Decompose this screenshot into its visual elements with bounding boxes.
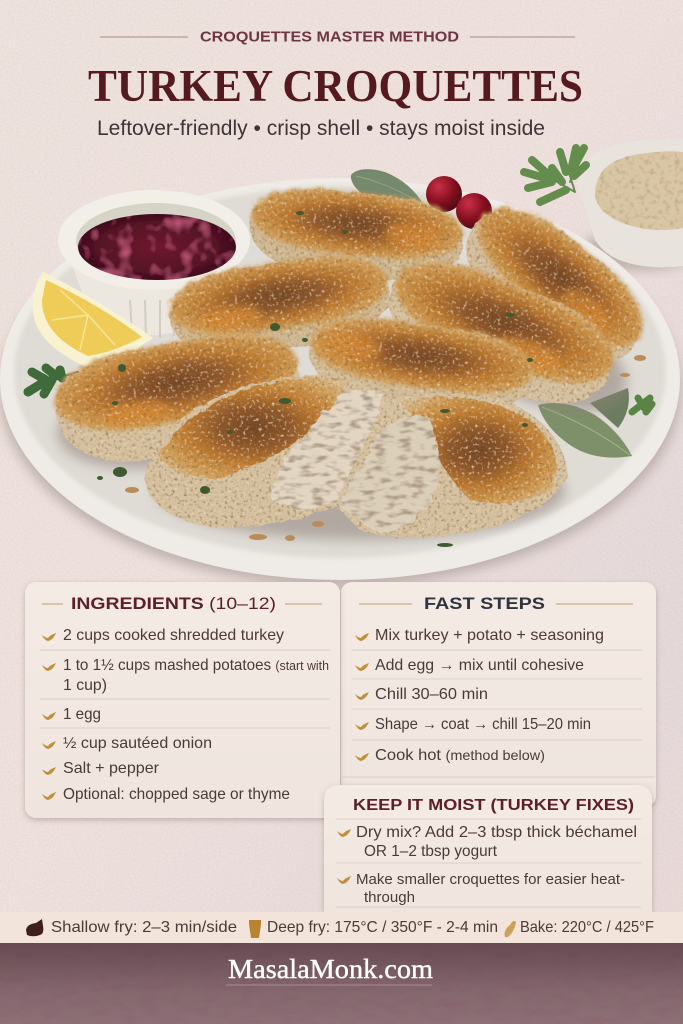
croquette middle right (373, 243, 627, 423)
lemon wedge (33, 272, 153, 366)
broken croquette right (335, 393, 568, 538)
ingredient texts: ½ cup sautéed onion (63, 735, 212, 752)
title: TURKEY CROQUETTES (88, 61, 583, 111)
croquette center (304, 310, 538, 420)
moist texts: Make smaller croquettes for easier heat- (356, 871, 625, 888)
dip ramekin (58, 190, 250, 338)
ingredient texts (63, 627, 329, 803)
ingredient texts: Salt + pepper (63, 760, 160, 777)
step checks (355, 633, 369, 761)
step texts: Shape → coat → chill 15–20 min (375, 716, 591, 733)
header (88, 28, 583, 140)
panel: ingredients (25, 582, 340, 818)
eyebrow: croquettes master method: CROQUETTES MASTER METHOD (200, 28, 459, 46)
icon: oven mitt (505, 921, 516, 937)
parsley left (28, 368, 78, 394)
parsley sprig top right (524, 148, 586, 202)
moist texts (356, 824, 637, 906)
ingredient texts: Optional: chopped sage or thyme (63, 786, 290, 803)
parsley right (632, 398, 652, 412)
croquette top center (245, 182, 467, 288)
croquette middle left (164, 248, 396, 364)
shallow fry text: Shallow fry: 2–3 min/side (51, 919, 237, 936)
herb flecks (97, 211, 533, 547)
subtitle: Leftover-friendly • crisp shell • stays moist inside (97, 117, 545, 140)
moist checks (337, 829, 351, 884)
heading: keep it moist: KEEP IT MOIST (TURKEY FIXES) (353, 797, 634, 814)
step texts: Add egg → mix until cohesive (375, 657, 584, 674)
cherries (426, 176, 492, 229)
step texts: Mix turkey + potato + seasoning (375, 627, 604, 644)
ingredient texts: 2 cups cooked shredded turkey (63, 627, 284, 644)
croquette left (47, 322, 311, 474)
ingredient texts: 1 cup) (63, 677, 107, 694)
step texts: Cook hot (method below) (375, 747, 545, 764)
croquette top right (444, 187, 662, 387)
heading: ingredients: INGREDIENTS (10–12) (71, 594, 276, 613)
bake text: Bake: 220°C / 425°F (520, 919, 654, 936)
moist texts: through (364, 889, 415, 906)
icon: fryer (249, 920, 261, 938)
broken croquette left (145, 376, 385, 527)
moist texts: OR 1–2 tbsp yogurt (364, 843, 498, 860)
website: MasalaMonk.com (228, 954, 433, 984)
cooking methods strip (0, 912, 683, 943)
panel: keep it moist (324, 785, 652, 912)
step texts (375, 627, 604, 764)
plate shadow under croquettes (49, 251, 645, 540)
footer band (0, 943, 683, 1024)
deep fry text: Deep fry: 175°C / 350°F - 2-4 min (267, 919, 498, 936)
ingredient texts: 1 egg (63, 706, 101, 723)
icon: pan (26, 919, 43, 936)
moist texts: Dry mix? Add 2–3 tbsp thick béchamel (356, 824, 637, 841)
sage leaf top (351, 169, 424, 205)
ingredient checks (42, 633, 56, 800)
food photo illustration (0, 139, 683, 586)
crumbs on plate (125, 355, 646, 541)
heading: fast steps: FAST STEPS (424, 594, 545, 613)
sage leaves right (538, 388, 632, 458)
plate (0, 178, 680, 586)
panel: fast steps (341, 582, 656, 807)
step texts: Chill 30–60 min (375, 686, 488, 703)
right ramekin with breadcrumbs (578, 139, 683, 270)
ingredient texts: 1 to 1½ cups mashed potatoes (start with (63, 657, 329, 674)
